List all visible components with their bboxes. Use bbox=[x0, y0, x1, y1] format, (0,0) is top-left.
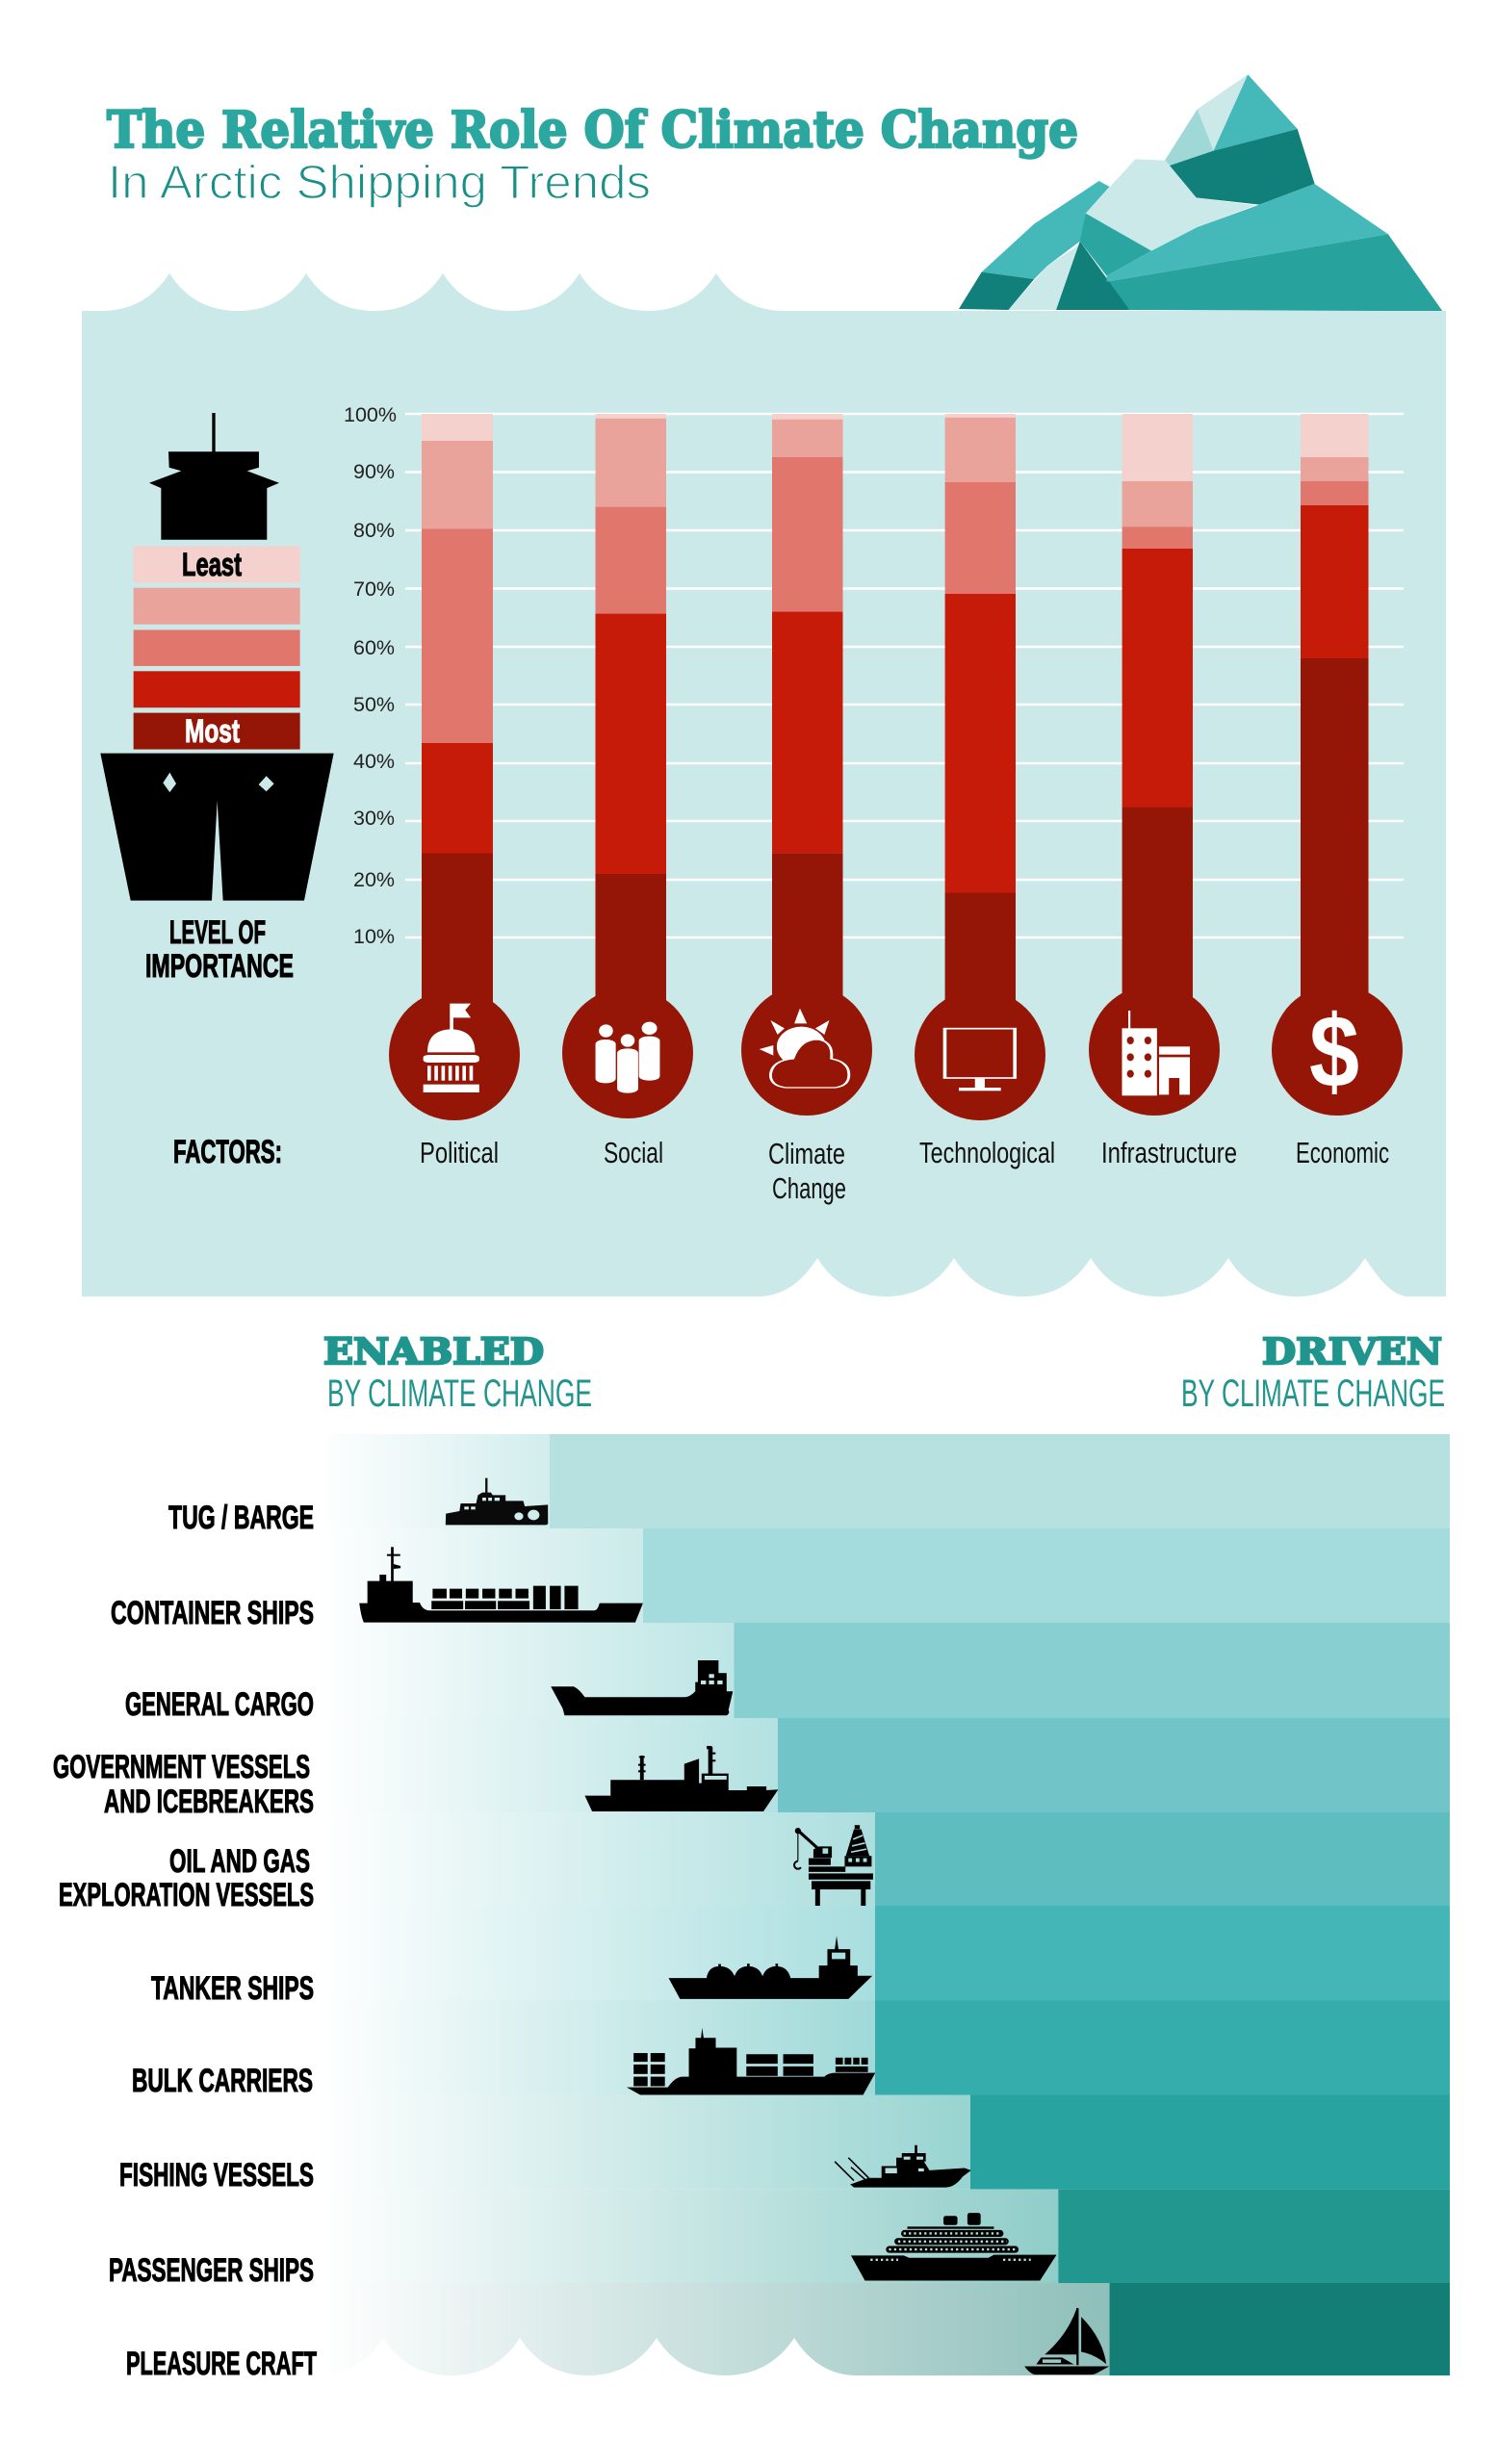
row: container ships bbox=[111, 1528, 1450, 1631]
icon: iceberg bbox=[959, 74, 1442, 311]
label: social: Social bbox=[604, 1136, 663, 1169]
heading: enabled: ENABLED bbox=[323, 1330, 544, 1373]
label: climate change: Change bbox=[772, 1171, 846, 1205]
icon: capitol building bbox=[424, 1004, 479, 1092]
row: oil and gas exploration vessels bbox=[59, 1812, 1450, 1913]
label: economic: Economic bbox=[1296, 1136, 1389, 1169]
subtitle: In Arctic Shipping Trends bbox=[108, 157, 651, 209]
icon: sailboat bbox=[1024, 2308, 1109, 2374]
row: bulk carriers bbox=[132, 2000, 1450, 2099]
legend: ship level of importance: Most bbox=[185, 713, 240, 750]
legend: ship level of importance: Least bbox=[182, 547, 242, 583]
icon: bulk carrier bbox=[627, 2028, 875, 2095]
heading: enabled bbox=[323, 1330, 592, 1415]
row: government vessels and icebreakers bbox=[53, 1718, 1450, 1820]
row: bulk carriers: BULK CARRIERS bbox=[132, 2063, 313, 2099]
chart: gridlines and percent axis: 60% bbox=[353, 637, 395, 659]
label: political: Political bbox=[420, 1136, 499, 1169]
icon: people bbox=[596, 1022, 659, 1093]
row: government vessels and icebreakers: AND ICEBREAKERS bbox=[104, 1784, 314, 1820]
title: The Relative Role Of Climate Change bbox=[107, 101, 1078, 160]
icon: cargo ship bbox=[551, 1660, 733, 1715]
bar: social bbox=[562, 414, 693, 1118]
icon: cruise ship bbox=[851, 2213, 1057, 2281]
row: oil and gas exploration vessels: EXPLORATION VESSELS bbox=[59, 1877, 314, 1913]
label: technological: Technological bbox=[919, 1136, 1055, 1169]
row: government vessels and icebreakers: GOVERNMENT VESSELS bbox=[53, 1749, 310, 1785]
icon: city buildings bbox=[1122, 1011, 1190, 1095]
row: tug / barge: TUG / BARGE bbox=[168, 1500, 314, 1536]
icon: oil rig bbox=[794, 1825, 873, 1906]
row: pleasure craft: PLEASURE CRAFT bbox=[126, 2346, 317, 2382]
row: pleasure craft bbox=[126, 2283, 1450, 2382]
icon: tug boat bbox=[446, 1478, 548, 1525]
icon: monitor bbox=[944, 1029, 1015, 1091]
chart: gridlines and percent axis: 100% bbox=[344, 404, 397, 426]
icon: icebreaker bbox=[584, 1746, 778, 1811]
chart: gridlines and percent axis: 80% bbox=[353, 520, 395, 542]
chart: gridlines and percent axis: 70% bbox=[353, 578, 395, 601]
bar: infrastructure bbox=[1089, 414, 1220, 1116]
panel: factors background with waves bbox=[82, 273, 1446, 1296]
icon: container ship bbox=[359, 1547, 643, 1623]
icon: dollar sign: $ bbox=[1309, 993, 1359, 1109]
row: tanker ships: TANKER SHIPS bbox=[151, 1970, 314, 2007]
row: tug / barge bbox=[168, 1434, 1450, 1536]
heading: driven bbox=[1181, 1330, 1445, 1415]
row: fishing vessels: FISHING VESSELS bbox=[119, 2157, 314, 2194]
chart: gridlines and percent axis: 20% bbox=[353, 869, 395, 891]
row: passenger ships: PASSENGER SHIPS bbox=[109, 2252, 314, 2289]
chart: gridlines and percent axis bbox=[344, 404, 1404, 948]
legend: ship level of importance bbox=[100, 413, 334, 985]
row: fishing vessels bbox=[119, 2094, 1450, 2194]
label: climate change bbox=[768, 1137, 846, 1205]
chart: gridlines and percent axis: 40% bbox=[353, 751, 395, 773]
row: oil and gas exploration vessels: OIL AND GAS bbox=[169, 1843, 310, 1880]
chart: gridlines and percent axis: 50% bbox=[353, 694, 395, 716]
legend: ship level of importance: LEVEL OF bbox=[169, 914, 266, 951]
bar: political bbox=[389, 414, 520, 1120]
label: infrastructure: Infrastructure bbox=[1101, 1136, 1237, 1169]
chart: gridlines and percent axis: 10% bbox=[353, 926, 395, 948]
bar: climate change bbox=[741, 414, 872, 1116]
icon: sun and cloud bbox=[760, 1009, 849, 1088]
legend: ship level of importance: IMPORTANCE bbox=[145, 948, 294, 985]
row: general cargo: GENERAL CARGO bbox=[125, 1686, 314, 1723]
label: factors: FACTORS: bbox=[173, 1134, 282, 1170]
row: passenger ships bbox=[109, 2190, 1450, 2289]
icon: tanker bbox=[669, 1936, 872, 1999]
chart: gridlines and percent axis: 30% bbox=[353, 808, 395, 830]
bar: economic bbox=[1272, 414, 1403, 1116]
bar: technological bbox=[915, 414, 1045, 1120]
row: general cargo bbox=[125, 1623, 1450, 1723]
icon: fishing boat bbox=[835, 2145, 971, 2188]
chart: gridlines and percent axis: 90% bbox=[353, 461, 395, 483]
row: container ships: CONTAINER SHIPS bbox=[111, 1595, 314, 1631]
row: tanker ships bbox=[151, 1906, 1450, 2007]
heading: enabled: BY CLIMATE CHANGE bbox=[327, 1373, 592, 1415]
label: climate change: Climate bbox=[768, 1137, 845, 1170]
heading: driven: DRIVEN bbox=[1262, 1330, 1442, 1373]
